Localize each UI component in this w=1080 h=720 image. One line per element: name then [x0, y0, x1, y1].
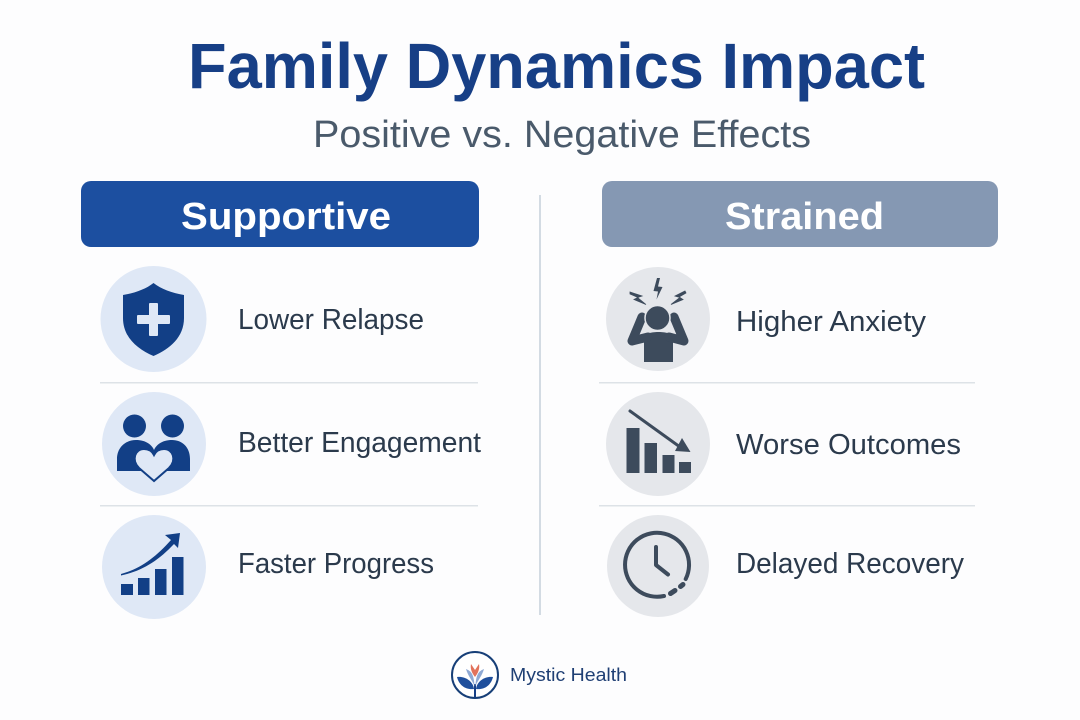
- item: lower relapse: [100, 266, 424, 372]
- title: Family Dynamics Impact: [188, 30, 925, 102]
- header: strained: Strained: [725, 196, 884, 238]
- label: higher anxiety: Higher Anxiety: [736, 306, 926, 338]
- header: strained: [602, 181, 998, 247]
- icon: rising bars and arrow: [121, 533, 184, 595]
- label: faster progress: Faster Progress: [238, 548, 434, 580]
- item: higher anxiety: [606, 267, 926, 371]
- item: better engagement: [102, 392, 481, 496]
- footer logo: [452, 652, 627, 698]
- label: delayed recovery: Delayed Recovery: [736, 548, 964, 580]
- icon: shield with cross: [123, 283, 184, 356]
- subtitle: Positive vs. Negative Effects: [313, 114, 811, 156]
- header: supportive: [81, 181, 479, 247]
- brand name: Mystic Health: [510, 664, 627, 685]
- label: worse outcomes: Worse Outcomes: [736, 429, 961, 461]
- panel: strained: [599, 181, 998, 617]
- header: supportive: Supportive: [181, 196, 391, 238]
- icon: falling bars and arrow: [626, 411, 691, 473]
- icon: two people with heart: [117, 414, 190, 481]
- icon: clock: [625, 533, 689, 597]
- label: lower relapse: Lower Relapse: [238, 304, 424, 336]
- center divider: [539, 195, 541, 615]
- label: better engagement: Better Engagement: [238, 427, 481, 459]
- item: delayed recovery: [607, 515, 964, 617]
- item: faster progress: [102, 515, 434, 619]
- panel: supportive: [81, 181, 481, 619]
- item: worse outcomes: [606, 392, 961, 496]
- icon: stressed person: [630, 278, 686, 362]
- icon: lotus mark: [452, 652, 498, 698]
